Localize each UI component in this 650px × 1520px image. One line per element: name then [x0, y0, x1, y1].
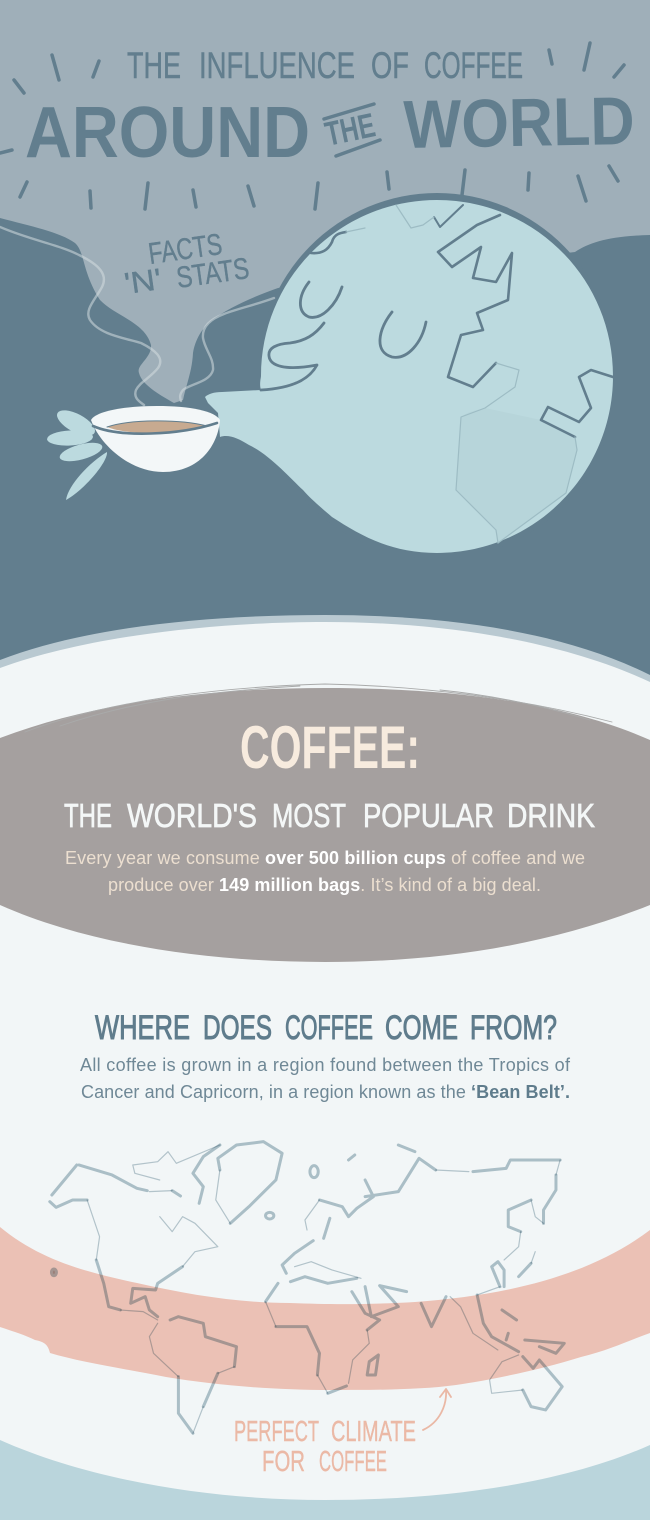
north america [50, 1145, 220, 1317]
heading: coffee: COFFEE: [240, 714, 420, 781]
heading: where does coffee come from: FROM? [470, 1009, 557, 1047]
title line: the influence of coffee [127, 45, 523, 86]
subheading: WORLD'S [127, 797, 257, 834]
coffee [107, 421, 207, 433]
coffee cup [47, 405, 220, 500]
world map [50, 1142, 564, 1433]
heading: where does coffee come from: WHERE [95, 1009, 190, 1047]
leaves [47, 405, 107, 500]
subheading [64, 797, 595, 834]
arrow to band [423, 1389, 451, 1430]
south america [170, 1317, 236, 1433]
lips [261, 323, 324, 390]
africa [266, 1283, 407, 1393]
steam lines [0, 227, 274, 405]
continents [311, 205, 613, 437]
title: around the world [25, 83, 635, 173]
subheading: DRINK [507, 797, 595, 834]
facts n stats label: FACTS [146, 228, 224, 271]
heading: where does coffee come from: COFFEE [285, 1009, 373, 1047]
perfect climate label: COFFEE [319, 1446, 387, 1478]
closed eyes [300, 282, 426, 357]
heading: where does coffee come from: DOES [203, 1009, 272, 1047]
facts n stats label [122, 228, 251, 301]
heading: where does coffee come from: COME [385, 1009, 458, 1047]
intro paragraph: Every year we consume over 500 billion cups of coffee and we [65, 848, 585, 868]
eurasia [282, 1158, 560, 1352]
globe outline [257, 193, 617, 559]
perfect climate label: PERFECT [234, 1416, 319, 1448]
white cup body [0, 622, 650, 1520]
facts n stats label: 'N' [122, 263, 164, 301]
rough brush edge [25, 684, 612, 732]
sun rays [0, 43, 624, 209]
intro paragraph [65, 848, 585, 895]
bean belt band [0, 1227, 650, 1390]
cup section [0, 615, 650, 1520]
south america shade [456, 408, 577, 543]
perfect climate label: FOR [262, 1446, 305, 1478]
dark landscape [0, 218, 650, 700]
region paragraph [80, 1055, 571, 1102]
header background [0, 0, 650, 700]
saucer background [0, 1440, 650, 1520]
intro paragraph: produce over 149 million bags. It’s kind of a big deal. [108, 875, 541, 895]
greenland [218, 1142, 282, 1223]
title line: the influence of coffee: INFLUENCE [199, 45, 355, 86]
title: around the world: THE [322, 106, 379, 154]
subheading: MOST [272, 797, 346, 834]
islands [310, 1166, 318, 1178]
australia [523, 1357, 562, 1410]
rim shadow [93, 421, 217, 434]
gray ellipse panel [0, 688, 650, 962]
cup bowl [91, 406, 220, 472]
region paragraph: All coffee is grown in a region found between the Tropics of [80, 1055, 571, 1075]
perfect climate label [234, 1416, 416, 1478]
subheading: POPULAR [363, 797, 494, 834]
heading: where does coffee come from [95, 1009, 557, 1047]
perfect climate label: CLIMATE [331, 1416, 416, 1448]
title line: the influence of coffee: COFFEE [424, 45, 523, 86]
region paragraph: Cancer and Capricorn, in a region known as the ‘Bean Belt’. [81, 1082, 570, 1102]
title: around the world: AROUND [25, 93, 310, 173]
facts n stats label: STATS [174, 252, 251, 295]
globe body [205, 200, 613, 553]
title line: the influence of coffee: OF [371, 45, 409, 86]
globe character [205, 193, 617, 559]
subheading: THE [64, 797, 112, 834]
faint coast lines [346, 205, 577, 543]
madagascar [367, 1355, 378, 1375]
title line: the influence of coffee: THE [127, 45, 181, 86]
indonesia [502, 1310, 564, 1353]
